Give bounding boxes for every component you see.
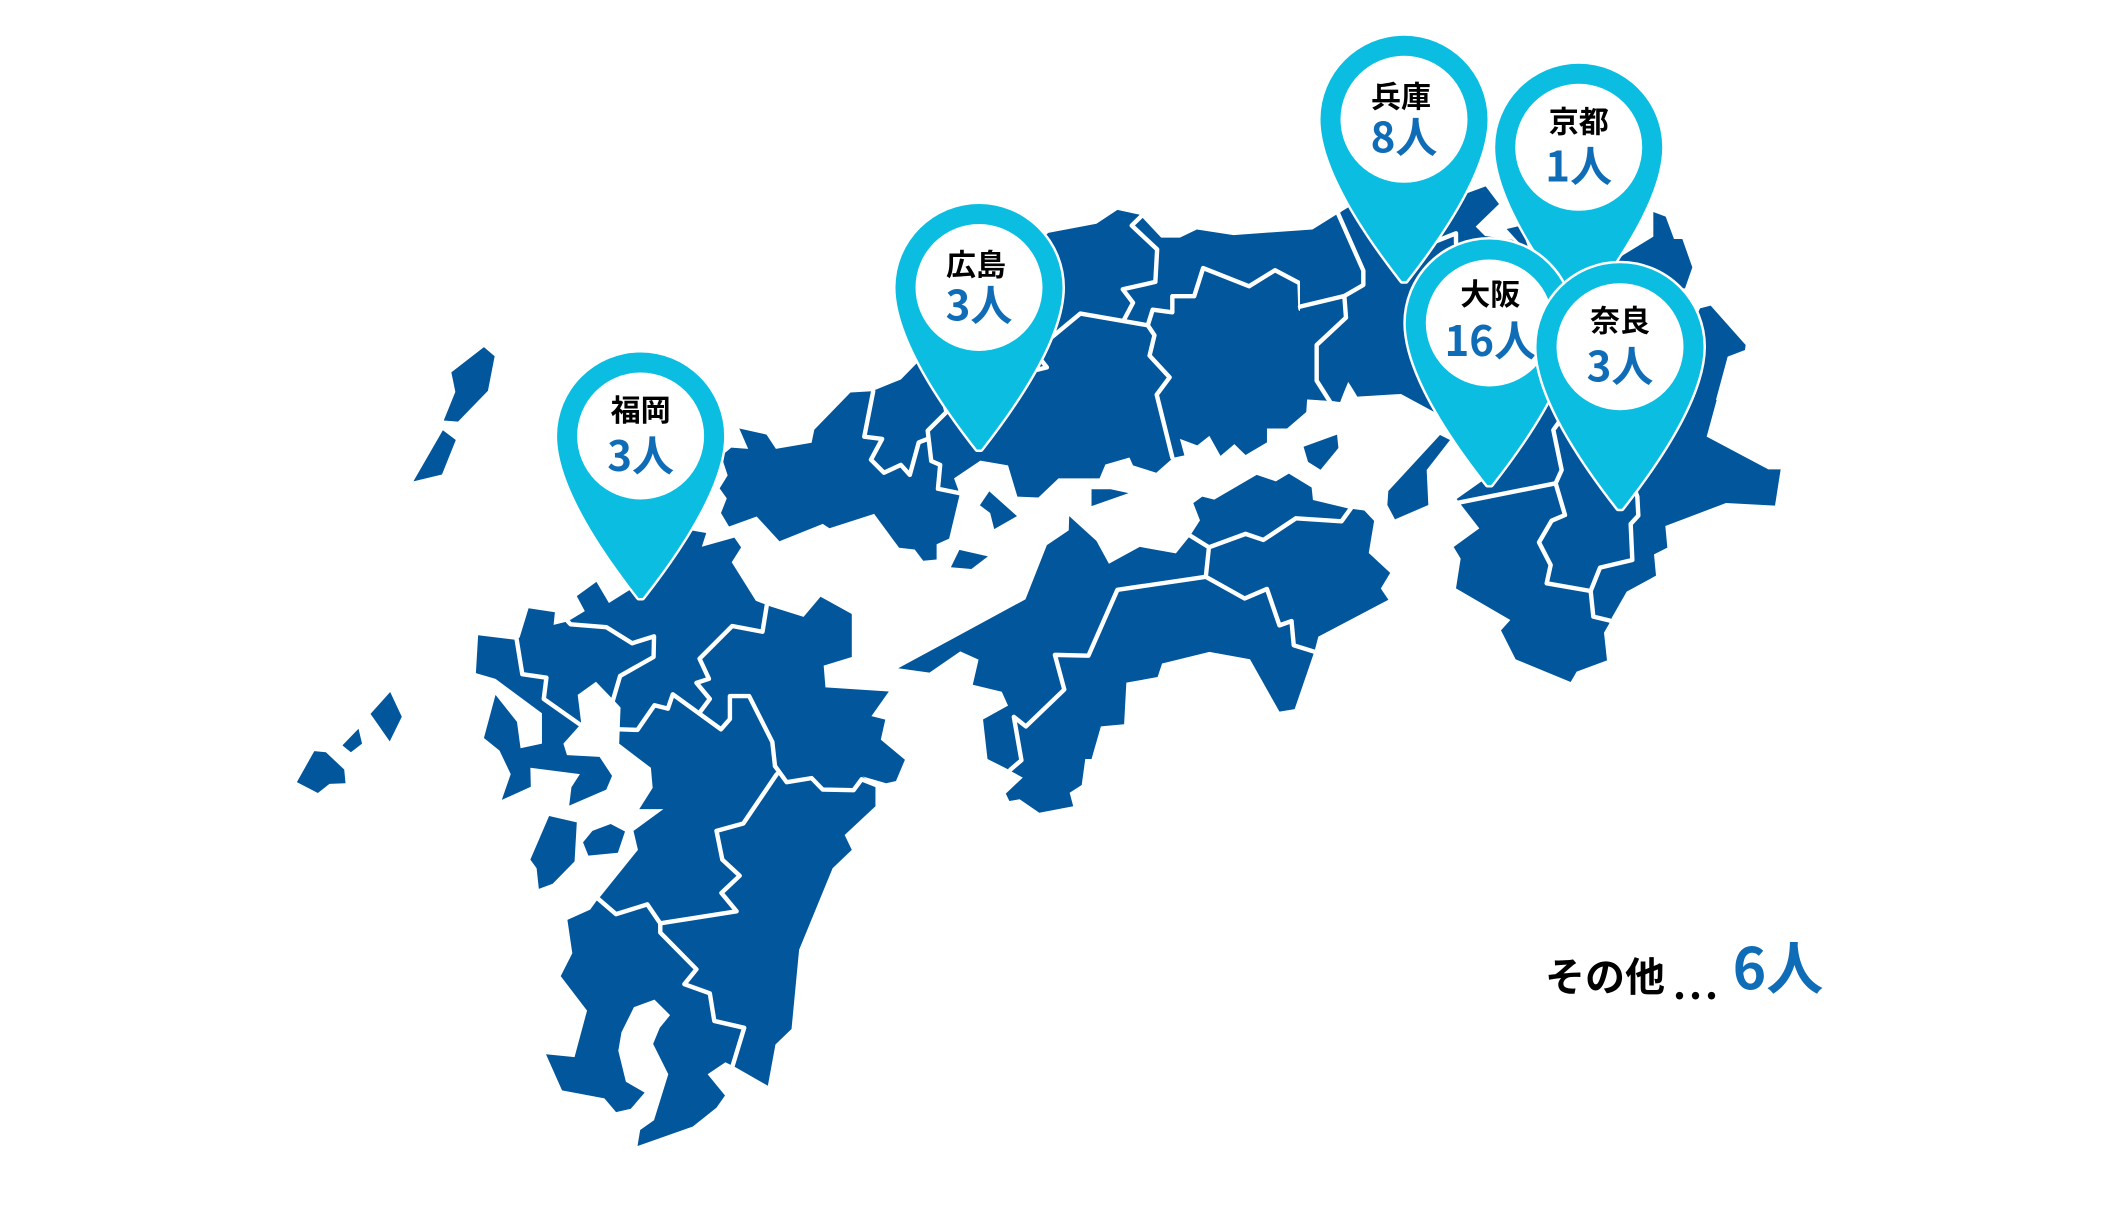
pin: Kyoto: 1人	[1545, 133, 1612, 194]
pin: Osaka	[1406, 240, 1573, 485]
callout: others count: 6人	[1733, 924, 1823, 1006]
map borders: Chugoku and Shikoku	[864, 213, 1364, 770]
callout: others count: その他	[1545, 945, 1665, 1003]
map land: Kyushu	[297, 347, 905, 1146]
pin: Hiroshima: 3人	[946, 272, 1012, 334]
pin: Hiroshima	[896, 204, 1062, 450]
pin: Osaka: 16人	[1445, 308, 1536, 369]
pin: Osaka: 大阪	[1460, 270, 1520, 314]
map borders: Kii peninsula	[1458, 421, 1638, 621]
map land: Chugoku and Shikoku	[720, 206, 1400, 813]
pin: Hyogo: 兵庫	[1371, 72, 1431, 116]
pin: Kyoto: 京都	[1549, 97, 1609, 141]
map land: Kii peninsula	[1454, 367, 1781, 682]
map: Chugoku and Shikoku	[720, 206, 1400, 813]
map borders: Kyushu	[517, 604, 876, 1067]
pin: Hyogo: 8人	[1371, 104, 1437, 165]
map borders: Kansai north	[1300, 213, 1456, 402]
pin: Fukuoka	[557, 352, 724, 598]
map: Kansai north	[1300, 186, 1746, 519]
callout: others count: ...	[1673, 953, 1721, 1011]
pin: Hyogo	[1320, 36, 1488, 281]
pin: Fukuoka: 3人	[607, 423, 674, 484]
pin: Nara	[1536, 263, 1704, 509]
pin: Nara: 奈良	[1590, 297, 1650, 341]
map land: Kansai north	[1300, 186, 1746, 519]
map: Kyushu and islands	[297, 347, 905, 1146]
callout: others count	[1545, 924, 1823, 1011]
pin: Fukuoka: 福岡	[611, 386, 671, 430]
pin: Hiroshima: 広島	[946, 240, 1006, 284]
map: Kii peninsula	[1454, 367, 1781, 682]
pin: Kyoto	[1495, 64, 1662, 309]
pin: Nara: 3人	[1587, 334, 1653, 395]
